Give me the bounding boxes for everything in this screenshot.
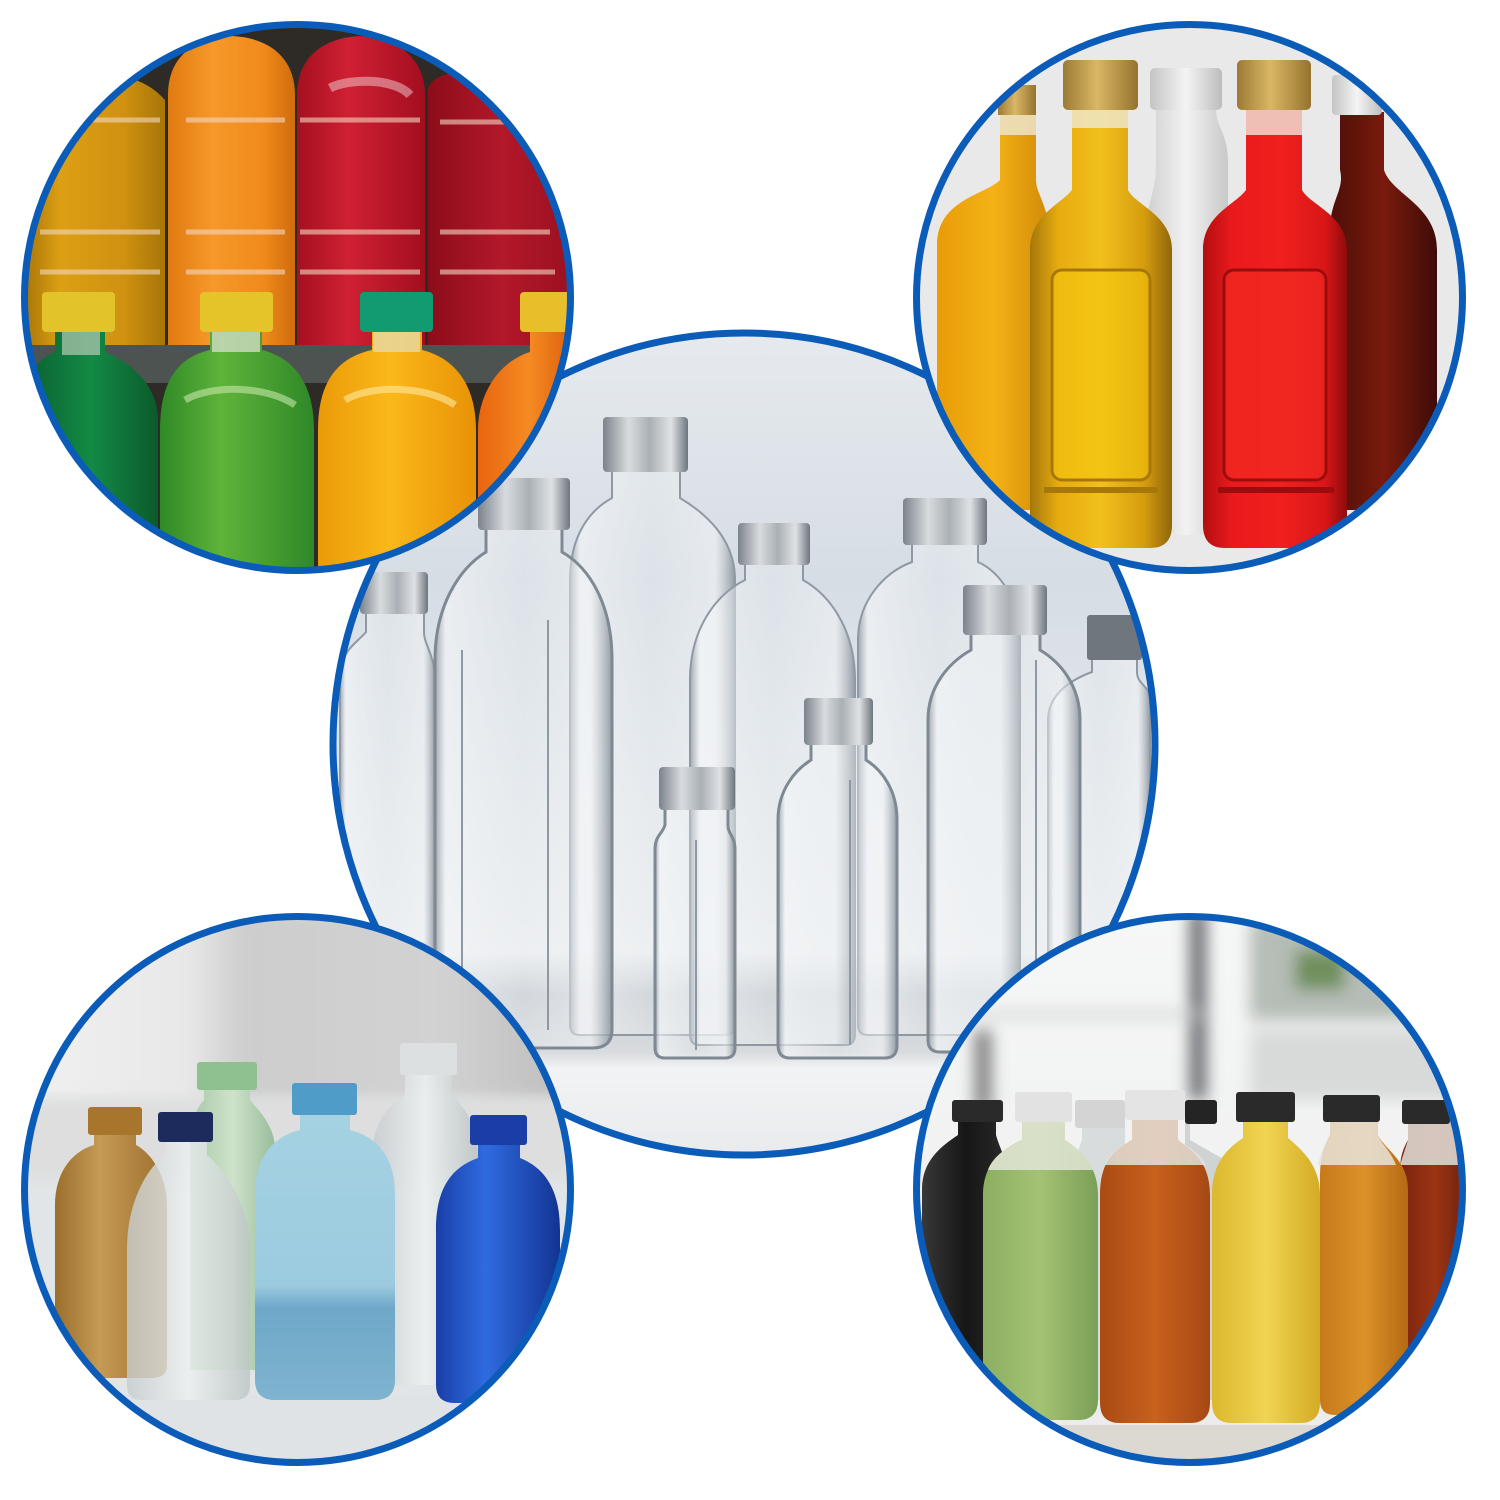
bottle: red [1203, 60, 1347, 548]
bottle: clear back right [372, 1043, 478, 1385]
bottle: clear back pair [1075, 1100, 1225, 1400]
bottle: dark red right [1330, 75, 1437, 510]
panel: top-right circle with colourful bottles [916, 24, 1462, 570]
bottle: right front clear [928, 585, 1080, 1052]
bottle: back left clear [340, 572, 435, 960]
bottle: orange brown [1100, 1090, 1210, 1423]
shelf [32, 345, 530, 383]
panel: bottom-left circle with tinted bottles [20, 910, 580, 1475]
bottle: yellow left [937, 85, 1050, 510]
bottle: golden [1030, 60, 1172, 548]
bottle: orange [478, 292, 567, 498]
panel: top-left circle with juice bottles [20, 24, 580, 580]
bottle: far right clear [1048, 615, 1150, 960]
bottle: dark red right [1400, 1100, 1459, 1348]
bottle row: back juices [25, 36, 575, 350]
panel: bottom-right circle with juice bottles and window [910, 910, 1470, 1475]
bottle: back right clear [858, 498, 1020, 1035]
bottle: yellow [318, 292, 476, 580]
bottle: light blue [255, 1083, 395, 1400]
bottle: pale green [190, 1062, 275, 1370]
bottle: black [922, 1100, 1003, 1362]
bottle: cobalt blue [436, 1115, 560, 1403]
blurred window background [964, 920, 1444, 1104]
bottle: large left clear [435, 478, 612, 1048]
bottle: clear middle [1145, 68, 1228, 535]
bottle: small middle clear [778, 698, 897, 1058]
bottle: green [983, 1092, 1098, 1420]
bottle: amber [55, 1107, 167, 1378]
bottle: middle clear [690, 523, 855, 1045]
bottle: tall back clear [570, 417, 735, 1035]
bottle: green [160, 292, 314, 580]
bottle: amber [1318, 1095, 1408, 1415]
bottle: small front clear [655, 767, 735, 1058]
bottle: yellow [1212, 1092, 1320, 1423]
bottle: dark green [36, 292, 158, 528]
bottle: clear front [127, 1112, 250, 1400]
panel: centre circle with clear bottles [330, 330, 1160, 1160]
